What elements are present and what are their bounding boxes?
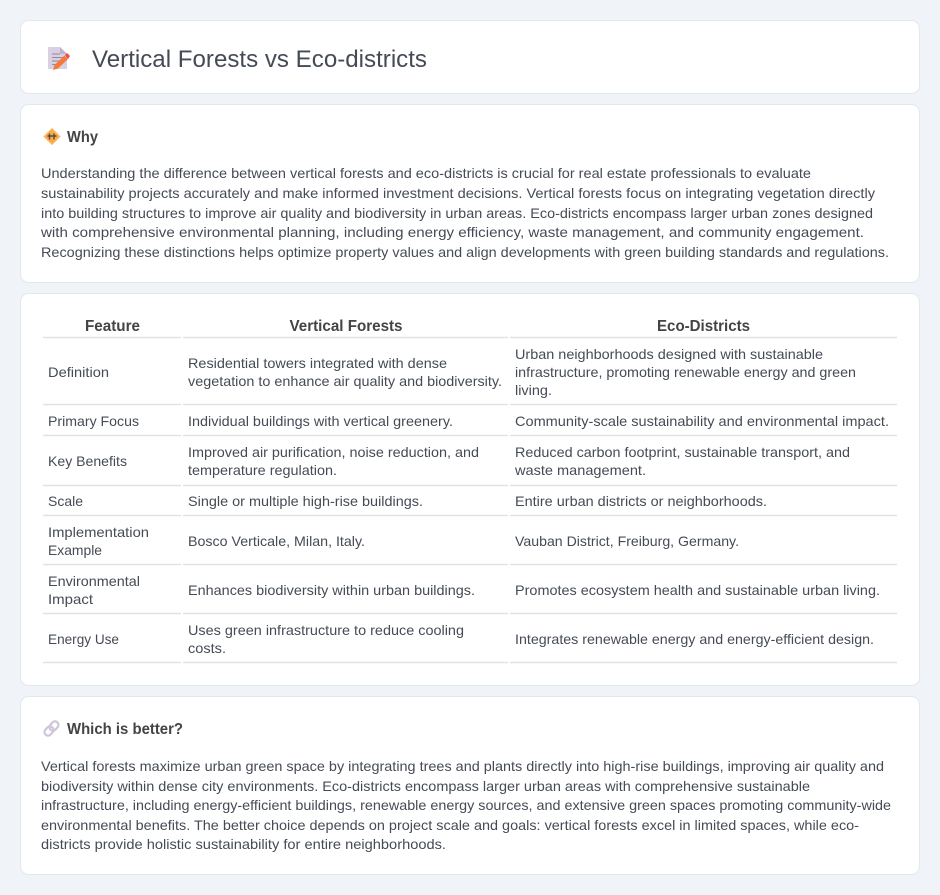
row: primary focus: Community-scale sustainability and environmental impact.	[515, 413, 889, 429]
table header	[85, 318, 750, 335]
text block: which is better: biodiversity within dense city environments. Eco-districts encompass larger urban areas with comprehensive sustainable	[41, 778, 810, 794]
row: key benefits: Improved air purification, noise reduction, and	[188, 444, 479, 460]
row: scale: Scale	[48, 493, 83, 509]
row: definition	[48, 346, 856, 398]
row: definition: Urban neighborhoods designed with sustainable	[515, 346, 823, 362]
text block: why: sustainability projects accurately and make informed investment decisions. Vertical forests focus on integrating vegetation directly	[41, 185, 875, 201]
row: primary focus	[48, 413, 889, 429]
row: scale: Entire urban districts or neighborhoods.	[515, 493, 767, 509]
panel: which is better	[20, 696, 920, 874]
row: key benefits: temperature regulation.	[188, 462, 337, 478]
text block: which is better: infrastructure, including energy-efficient buildings, renewable energy sources, and extensive green spaces promoting community-wide	[41, 797, 891, 813]
icon: link	[43, 720, 60, 737]
icon: memo with pencil	[48, 47, 70, 70]
heading: why: Why	[67, 129, 98, 146]
row: scale: Single or multiple high-rise buildings.	[188, 493, 423, 509]
row: environmental impact: Enhances biodiversity within urban buildings.	[188, 582, 475, 598]
title: Vertical Forests vs Eco-districts	[92, 46, 427, 73]
row: environmental impact: Impact	[48, 591, 93, 607]
row: energy use	[48, 622, 874, 656]
row: implementation example	[48, 524, 739, 558]
table header: Feature	[85, 318, 140, 335]
row: definition: living.	[515, 382, 552, 398]
row: energy use: Energy Use	[48, 631, 119, 647]
row: energy use: Uses green infrastructure to reduce cooling	[188, 622, 464, 638]
row: key benefits: Reduced carbon footprint, sustainable transport, and	[515, 444, 850, 460]
row: implementation example: Implementation	[48, 524, 149, 540]
row: primary focus: Primary Focus	[48, 413, 139, 429]
row: implementation example: Example	[48, 542, 102, 558]
row: energy use: Integrates renewable energy and energy-efficient design.	[515, 631, 874, 647]
text block: why: Understanding the difference between vertical forests and eco-districts is crucial for real estate professionals to evaluate	[41, 165, 811, 181]
panel: comparison table	[20, 294, 920, 686]
text block: why: Recognizing these distinctions helps optimize property values and align developments with green building standards and regulations.	[41, 244, 889, 260]
row: key benefits: Key Benefits	[48, 453, 127, 469]
row: implementation example: Vauban District, Freiburg, Germany.	[515, 533, 739, 549]
row: environmental impact: Environmental	[48, 573, 140, 589]
text block: which is better: Vertical forests maximize urban green space by integrating trees and plants directly into high-rise buildings, improving air quality and	[41, 758, 884, 774]
text block: which is better: environmental benefits. The better choice depends on project scale and goals: vertical forests excel in limited spaces, while eco-	[41, 817, 859, 833]
text block: which is better: districts provide holistic sustainability for entire neighborhoods.	[41, 836, 446, 852]
row: environmental impact	[48, 573, 880, 607]
row: definition: Definition	[48, 364, 109, 380]
row: environmental impact: Promotes ecosystem health and sustainable urban living.	[515, 582, 880, 598]
text block: which is better	[41, 758, 891, 852]
panel: header	[20, 20, 920, 94]
table header: Vertical Forests	[290, 318, 403, 335]
row: definition: vegetation to enhance air quality and biodiversity.	[188, 373, 502, 389]
icon: warning diamond	[44, 128, 60, 144]
row: definition: infrastructure, promoting renewable energy and green	[515, 364, 856, 380]
row: definition: Residential towers integrated with dense	[188, 355, 447, 371]
text block: why: into building structures to improve air quality and biodiversity in urban areas. Eco-districts encompass larger urban zones designed	[41, 205, 873, 221]
row: key benefits: waste management.	[514, 462, 646, 478]
row: implementation example: Bosco Verticale, Milan, Italy.	[188, 533, 365, 549]
heading: which is better: Which is better?	[67, 721, 183, 738]
row: key benefits	[48, 444, 850, 478]
text block: why	[40, 165, 889, 260]
panel: why	[20, 104, 920, 282]
text block: why: with comprehensive environmental planning, including energy efficiency, waste management, and community engagement.	[40, 224, 864, 240]
row: energy use: costs.	[188, 640, 226, 656]
row: primary focus: Individual buildings with vertical greenery.	[188, 413, 453, 429]
row: scale	[48, 493, 767, 509]
table header: Eco-Districts	[657, 318, 750, 335]
